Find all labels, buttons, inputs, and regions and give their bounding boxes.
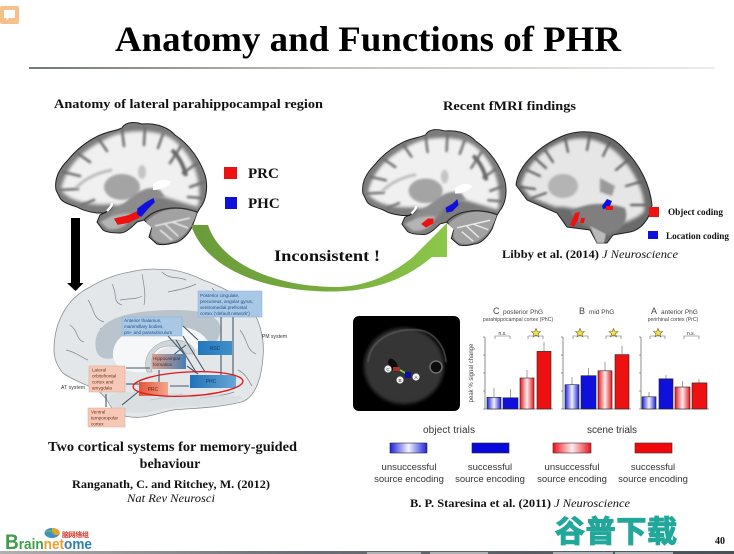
panel: MRI scan: C <box>386 367 390 372</box>
box: lateral orbitofrontal: Lateral <box>92 368 106 372</box>
swatch: successful object: source encoding <box>455 474 525 485</box>
panel: MRI scan: A <box>414 375 418 380</box>
box: PRC <box>139 382 168 396</box>
citation: Ranganath <box>72 477 270 505</box>
box: lateral orbitofrontal <box>89 366 125 392</box>
box: hippocampal formation: Hippocampal <box>153 356 180 361</box>
connection arrows <box>106 317 233 407</box>
citation: Ranganath: Ranganath, C. and Ritchey, M. (2012) <box>72 477 270 491</box>
chart: A anterior PhG: anterior PhG <box>661 309 698 316</box>
box: anterior thalamus: pre- and parasubiculum <box>124 330 172 335</box>
brain: anatomy sagittal <box>56 123 207 245</box>
diagram: cortical systems <box>54 269 287 427</box>
page number: 40 <box>715 536 725 547</box>
brain: fMRI sagittal 2 <box>516 132 652 243</box>
logo: Brainnetome: Brainnetome <box>5 531 92 554</box>
box: anterior thalamus <box>122 317 182 336</box>
region: red patches <box>570 212 585 227</box>
legend: PRC and PHC: PRC <box>248 166 279 182</box>
highlight ellipse <box>132 369 244 399</box>
swatch: successful scene <box>618 443 688 485</box>
box: ventral temporopolar: cortex <box>91 422 104 426</box>
swatch: unsuccessful object <box>374 443 444 485</box>
box: posterior cingulate <box>198 291 262 317</box>
label: inconsistent: Inconsistent ! <box>274 248 380 265</box>
axis label: peak % signal change <box>469 343 475 402</box>
watermark: 谷普下载 <box>555 516 677 549</box>
chart: C posterior PhG <box>483 306 553 409</box>
chart: C posterior PhG: C <box>493 306 500 316</box>
box: ventral temporopolar: temporopolar <box>91 416 119 420</box>
region: PRC red <box>115 212 139 224</box>
region: PHC blue <box>138 199 154 216</box>
label: AT system: AT system <box>61 385 85 391</box>
heading: anatomy: Anatomy of lateral parahippocampal region <box>54 96 324 111</box>
swatch: successful object <box>455 443 525 485</box>
icon: comment badge <box>0 6 19 24</box>
chart: A anterior PhG: n.s. <box>687 331 695 337</box>
chart: A anterior PhG <box>639 306 709 409</box>
legend: PRC and PHC: PHC <box>248 196 280 212</box>
arrow: black down <box>67 218 84 291</box>
box: posterior cingulate: cortex ('default network') <box>200 311 250 316</box>
region: blue patch <box>602 199 612 209</box>
swatch: successful scene: successful <box>631 462 675 473</box>
legend: trial types <box>374 425 688 485</box>
chart: A anterior PhG: A <box>651 306 657 316</box>
region: red <box>422 219 433 227</box>
chart: A anterior PhG: perirhinal cortex (PrC) <box>648 317 699 323</box>
box: RSC <box>198 341 232 355</box>
box: PHC <box>190 375 236 388</box>
swatch: unsuccessful object: unsuccessful <box>382 462 436 473</box>
citation: Staresina: B. P. Staresina et al. (2011) J Neuroscience <box>410 496 631 510</box>
chart: C posterior PhG: posterior PhG <box>503 309 543 316</box>
chart: B mid PhG: B <box>579 306 585 316</box>
box: anterior thalamus: mammillary bodies, <box>124 324 164 329</box>
box: anterior thalamus: Anterior thalamus, <box>124 318 161 323</box>
legend: coding: Object coding <box>668 208 723 218</box>
region: blue <box>446 200 458 212</box>
panel: MRI scan <box>353 316 460 411</box>
label: PM system: PM system <box>262 334 287 340</box>
swatch: unsuccessful scene: source encoding <box>537 474 607 485</box>
cingulate band <box>95 310 220 359</box>
citation: Ranganath: Nat Rev Neurosci <box>126 491 215 505</box>
legend: trial types: object trials <box>423 425 475 436</box>
swatch: successful scene: source encoding <box>618 474 688 485</box>
box: hippocampal formation: formation <box>153 362 173 367</box>
heading: recent fMRI: Recent fMRI findings <box>443 98 576 113</box>
box: lateral orbitofrontal: cortex and <box>92 380 114 384</box>
panel: MRI scan: B <box>398 378 402 383</box>
legend: PRC and PHC <box>224 166 280 212</box>
bottom bar <box>0 551 734 554</box>
box: posterior cingulate: ventromedial prefrontal <box>200 305 247 310</box>
swatch: unsuccessful object: source encoding <box>374 474 444 485</box>
caption: two cortical systems: behaviour <box>140 457 200 472</box>
box: PRC: PRC <box>148 387 159 393</box>
box: lateral orbitofrontal: orbitofrontal <box>92 374 116 378</box>
white interior <box>113 326 210 372</box>
brain: fMRI sagittal 1 <box>363 130 506 246</box>
chart: C posterior PhG: parahippocampal cortex (PhC) <box>483 317 553 323</box>
box: lateral orbitofrontal: amygdala <box>92 386 112 390</box>
arrow: green curved <box>191 223 447 292</box>
chart: B mid PhG <box>561 306 631 409</box>
box: ventral temporopolar: Ventral <box>91 410 105 414</box>
box: posterior cingulate: precuneus, angular gyrus, <box>200 299 253 304</box>
icon: logo brain <box>44 528 60 538</box>
box: ventral temporopolar <box>88 408 125 427</box>
chart: B mid PhG: mid PhG <box>589 309 614 316</box>
swatch: successful object: successful <box>468 462 512 473</box>
caption: two cortical systems: Two cortical systems for memory-guided <box>48 440 297 455</box>
swatch: unsuccessful scene: unsuccessful <box>545 462 599 473</box>
swatch: unsuccessful scene <box>537 443 607 485</box>
chart: C posterior PhG: n.s. <box>498 331 507 337</box>
citation: Libby: Libby et al. (2014) J Neuroscience <box>502 247 679 261</box>
box: hippocampal formation <box>152 354 186 369</box>
brain outline <box>54 269 263 417</box>
logo: Brainnetome: 脑网络组 <box>62 530 89 540</box>
box: RSC: RSC <box>210 346 221 352</box>
legend: coding: Location coding <box>666 232 729 242</box>
legend: coding <box>648 207 729 242</box>
legend: trial types: scene trials <box>587 425 637 436</box>
box: posterior cingulate: Posterior cingulate, <box>200 293 239 298</box>
box: PHC: PHC <box>206 379 217 385</box>
caption: two cortical systems <box>48 440 297 472</box>
title: Anatomy and Functions of PHR <box>115 19 622 59</box>
